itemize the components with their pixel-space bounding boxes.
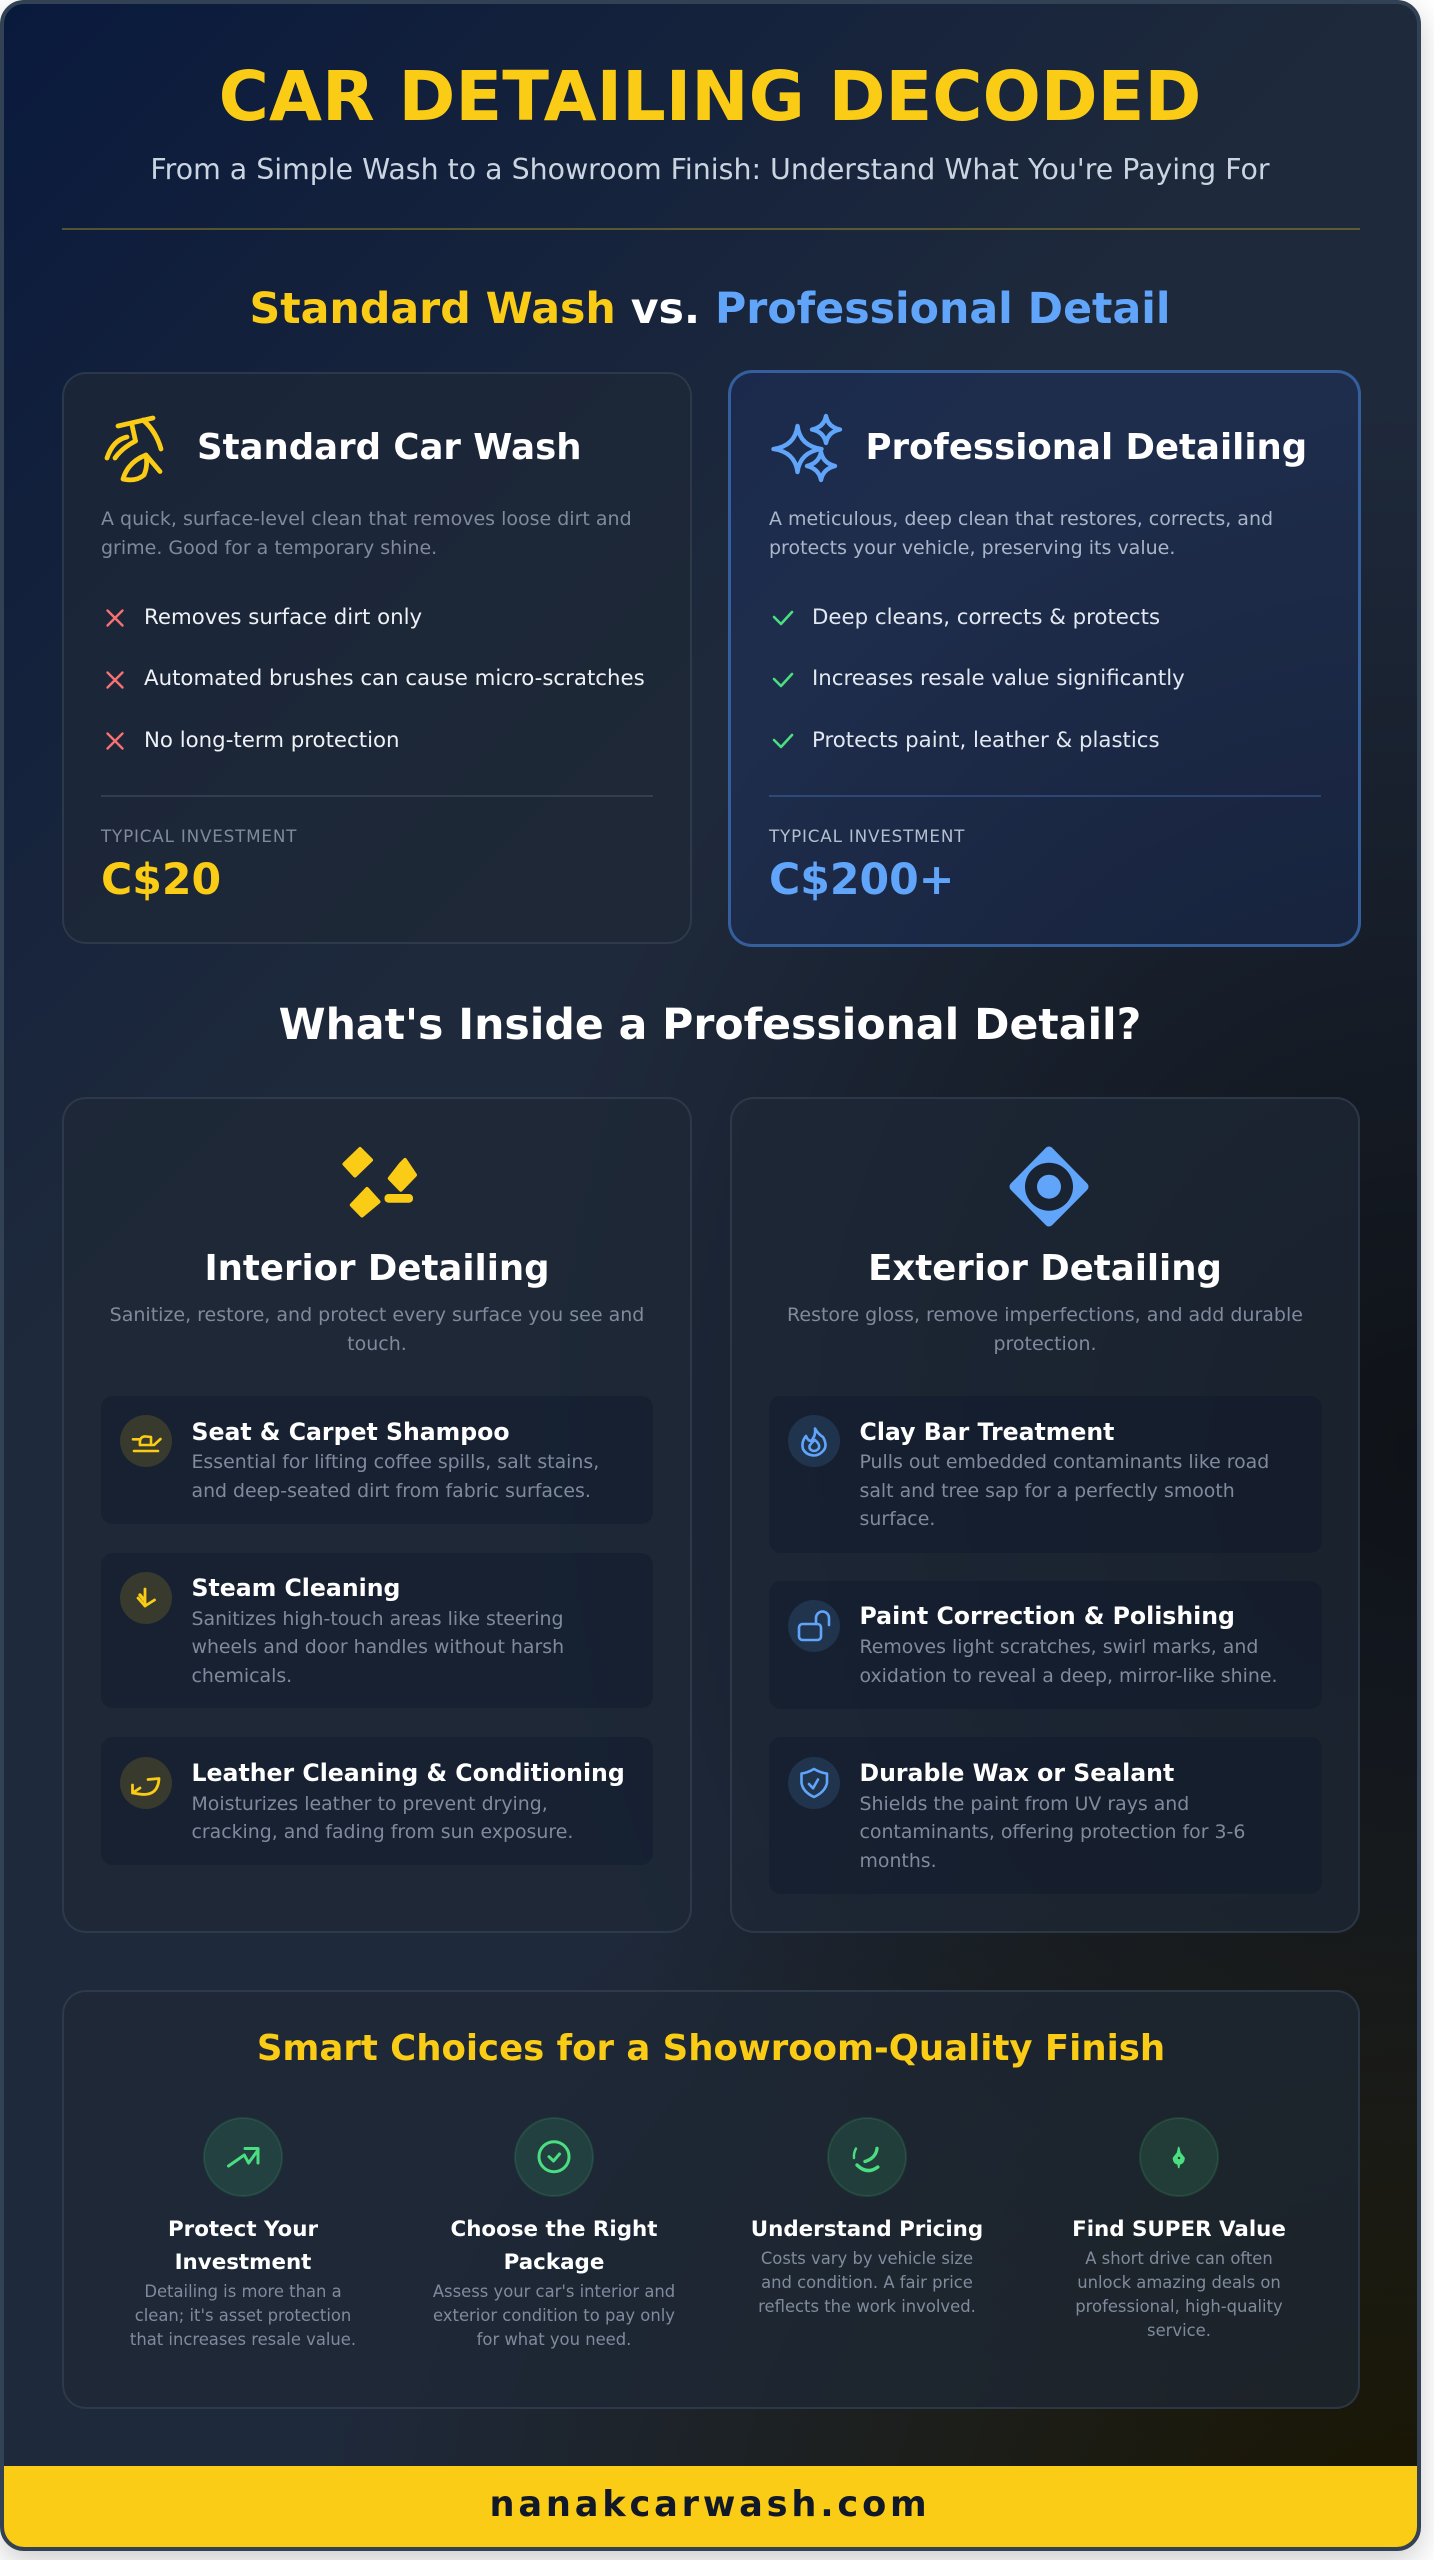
icon: lock xyxy=(788,1600,840,1652)
heading: Clay Bar Treatment xyxy=(860,1418,1114,1446)
text xyxy=(433,2282,675,2349)
column: find super value xyxy=(1044,2117,1314,2387)
text: and deep-seated dirt from fabric surfaces. xyxy=(192,1480,591,1502)
card: seat & carpet shampoo xyxy=(101,1396,653,1524)
icon: check circle xyxy=(514,2117,594,2197)
panel: professional detailing xyxy=(728,370,1361,947)
heading: Find SUPER Value xyxy=(1072,2217,1286,2242)
text xyxy=(1044,2247,1314,2343)
heading: what's inside: What's Inside a Professional Detail? xyxy=(279,1000,1141,1050)
description: Sanitize, restore, and protect every surface you see and xyxy=(110,1304,644,1326)
description: A quick, surface-level clean that removes loose dirt and xyxy=(101,508,632,530)
price: C$20: C$20 xyxy=(101,855,221,905)
price: C$200+: C$200+ xyxy=(769,855,954,905)
icon: cross xyxy=(106,671,124,689)
icon: cross xyxy=(106,609,124,627)
panel: exterior detailing xyxy=(730,1097,1360,1933)
text: Sanitizes high-touch areas like steering xyxy=(192,1608,563,1630)
text: surface. xyxy=(860,1508,935,1530)
text: contaminants, offering protection for 3-6 xyxy=(860,1821,1245,1843)
description: protection. xyxy=(993,1333,1097,1355)
column: protect your investment xyxy=(130,2117,356,2349)
description xyxy=(110,1304,644,1355)
heading: professional detailing: Professional Detailing xyxy=(866,427,1307,468)
heading: exterior detailing: Exterior Detailing xyxy=(868,1248,1222,1289)
text xyxy=(130,2282,356,2349)
text: oxidation to reveal a deep, mirror-like shine. xyxy=(860,1665,1277,1687)
card: clay bar xyxy=(769,1396,1322,1552)
text: clean; it's asset protection xyxy=(135,2306,351,2325)
text: Shields the paint from UV rays and xyxy=(860,1793,1189,1815)
heading: Seat & Carpet Shampoo xyxy=(192,1418,510,1446)
text: months. xyxy=(860,1850,937,1872)
icon: pricing xyxy=(827,2117,907,2197)
text: that increases resale value. xyxy=(130,2330,356,2349)
text: Costs vary by vehicle size xyxy=(761,2249,973,2268)
item: Protects paint, leather & plastics xyxy=(812,728,1160,752)
text xyxy=(860,1793,1245,1872)
heading: Steam Cleaning xyxy=(192,1574,400,1602)
text: Detailing is more than a xyxy=(144,2282,342,2301)
heading: Understand Pricing xyxy=(751,2217,983,2242)
icon: check xyxy=(772,610,794,626)
heading: Package xyxy=(504,2250,604,2275)
text: exterior condition to pay only xyxy=(433,2306,675,2325)
text xyxy=(860,1451,1269,1530)
icon: tag xyxy=(1139,2117,1219,2197)
text: for what you need. xyxy=(477,2330,631,2349)
text: Removes light scratches, swirl marks, and xyxy=(860,1636,1258,1658)
icon: sparkles xyxy=(771,414,842,482)
description xyxy=(787,1304,1303,1355)
icon: exterior xyxy=(1010,1146,1088,1226)
text: reflects the work involved. xyxy=(758,2297,976,2316)
icon: interior xyxy=(342,1146,417,1218)
column: choose the right package xyxy=(433,2117,675,2349)
header: title: CAR DETAILING DECODED xyxy=(219,57,1201,137)
icon: steam xyxy=(120,1572,172,1624)
text xyxy=(860,1636,1277,1687)
icon: check xyxy=(772,672,794,688)
footer xyxy=(4,2466,1417,2547)
label: typical investment: TYPICAL INVESTMENT xyxy=(769,826,965,846)
text: wheels and door handles without harsh xyxy=(192,1636,564,1658)
icon: standard wash xyxy=(104,416,164,482)
icon: shampoo xyxy=(120,1415,172,1467)
icon: check xyxy=(772,734,794,748)
heading: Durable Wax or Sealant xyxy=(860,1759,1174,1787)
text xyxy=(192,1793,573,1843)
icon: leather xyxy=(120,1757,172,1809)
card: paint correction xyxy=(769,1581,1322,1709)
text: cracking, and fading from sun exposure. xyxy=(192,1821,573,1843)
text xyxy=(192,1608,564,1687)
description: A meticulous, deep clean that restores, corrects, and xyxy=(769,508,1273,530)
text xyxy=(192,1451,599,1502)
card: steam cleaning xyxy=(101,1553,653,1708)
heading: smart choices: Smart Choices for a Showroom-Quality Finish xyxy=(257,2028,1165,2069)
heading: standard car wash: Standard Car Wash xyxy=(197,427,582,468)
text: salt and tree sap for a perfectly smooth xyxy=(860,1480,1235,1502)
text: A short drive can often xyxy=(1085,2249,1273,2268)
panel: smart choices xyxy=(62,1990,1360,2409)
footer: website: nanakcarwash.com xyxy=(489,2484,931,2524)
heading: Paint Correction & Polishing xyxy=(860,1602,1235,1630)
item: Increases resale value significantly xyxy=(812,666,1185,691)
heading: Leather Cleaning & Conditioning xyxy=(192,1759,625,1787)
description: protects your vehicle, preserving its value. xyxy=(769,537,1175,559)
header: subtitle: From a Simple Wash to a Showroom Finish: Understand What You're Paying For xyxy=(150,153,1270,186)
text xyxy=(758,2249,976,2316)
description xyxy=(101,508,632,559)
text: service. xyxy=(1147,2321,1211,2340)
label: typical investment: TYPICAL INVESTMENT xyxy=(101,826,297,846)
icon: cross xyxy=(106,732,124,750)
heading: comparison: Standard Wash vs. Professional Detail xyxy=(249,284,1171,334)
column: understand pricing xyxy=(751,2117,983,2316)
item: No long-term protection xyxy=(144,728,400,752)
card: durable wax xyxy=(769,1737,1322,1894)
heading: Protect Your xyxy=(168,2217,318,2242)
item: Deep cleans, corrects & protects xyxy=(812,604,1160,630)
list: drawbacks xyxy=(106,604,645,752)
heading: Choose the Right xyxy=(450,2217,657,2242)
text: chemicals. xyxy=(192,1665,292,1687)
text: Moisturizes leather to prevent drying, xyxy=(192,1793,548,1815)
icon: trend up xyxy=(203,2117,283,2197)
description xyxy=(769,508,1273,559)
heading: Investment xyxy=(175,2250,311,2275)
text: unlock amazing deals on xyxy=(1077,2273,1281,2292)
panel: standard car wash xyxy=(62,372,692,944)
text: professional, high-quality xyxy=(1075,2297,1283,2316)
card: leather cleaning xyxy=(101,1737,653,1865)
text: Essential for lifting coffee spills, salt stains, xyxy=(192,1451,599,1473)
icon: shield xyxy=(788,1757,840,1809)
heading xyxy=(450,2217,657,2275)
list: benefits xyxy=(772,604,1185,752)
heading: interior detailing: Interior Detailing xyxy=(204,1248,550,1289)
icon: flame xyxy=(788,1415,840,1467)
text: Assess your car's interior and xyxy=(433,2282,675,2301)
description: grime. Good for a temporary shine. xyxy=(101,537,437,559)
item: Removes surface dirt only xyxy=(144,604,422,630)
description: Restore gloss, remove imperfections, and add durable xyxy=(787,1304,1303,1326)
text: Pulls out embedded contaminants like road xyxy=(860,1451,1269,1473)
panel: interior detailing xyxy=(62,1097,692,1933)
text: and condition. A fair price xyxy=(761,2273,973,2292)
heading xyxy=(168,2217,318,2275)
item: Automated brushes can cause micro-scratches xyxy=(144,666,645,691)
description: touch. xyxy=(347,1333,407,1355)
